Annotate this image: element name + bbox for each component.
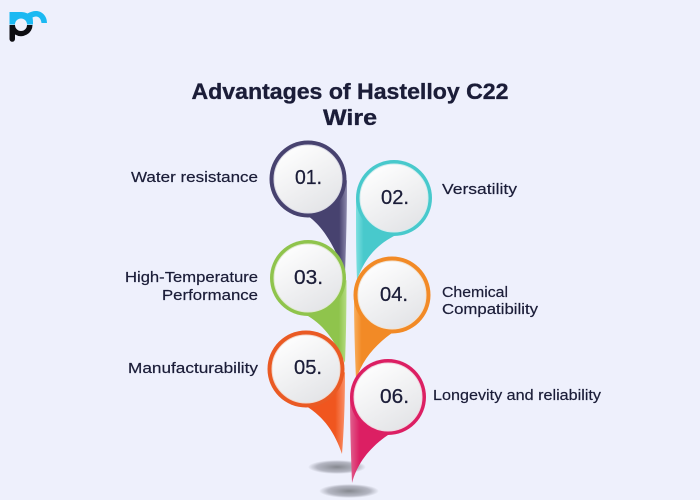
pin 01: 01. [295, 167, 322, 189]
pin 04: 04. [380, 284, 408, 306]
pin 03: 03. [294, 267, 323, 289]
label: chemical compatibility: Chemical [442, 284, 508, 301]
pin 05 [268, 330, 345, 454]
title [192, 79, 508, 130]
label: water resistance: Water resistance [131, 169, 258, 186]
pin 06: 06. [380, 386, 409, 408]
pin 02 [356, 160, 432, 280]
shadow under pin 5 [308, 460, 366, 474]
label: high-temperature performance: High-Temperature [125, 269, 258, 286]
pin 06 [350, 359, 426, 483]
pin 03 [270, 240, 346, 363]
pin 02: 02. [381, 187, 409, 209]
label: chemical compatibility: Compatibility [442, 301, 539, 318]
title: Advantages of Hastelloy C22 [192, 79, 508, 104]
label: longevity and reliability: Longevity and reliability [433, 387, 602, 404]
shadow under pin 6 [319, 484, 379, 498]
label: versatility: Versatility [442, 181, 518, 198]
title: Wire [323, 105, 377, 130]
label: high-temperature performance: Performance [162, 287, 258, 304]
label: high-temperature performance [125, 269, 258, 304]
label: chemical compatibility [442, 284, 539, 318]
label: manufacturability: Manufacturability [128, 360, 259, 377]
logo [10, 11, 47, 42]
pin 01 [270, 140, 347, 274]
pin 04 [354, 256, 430, 380]
pin 05: 05. [294, 357, 322, 379]
